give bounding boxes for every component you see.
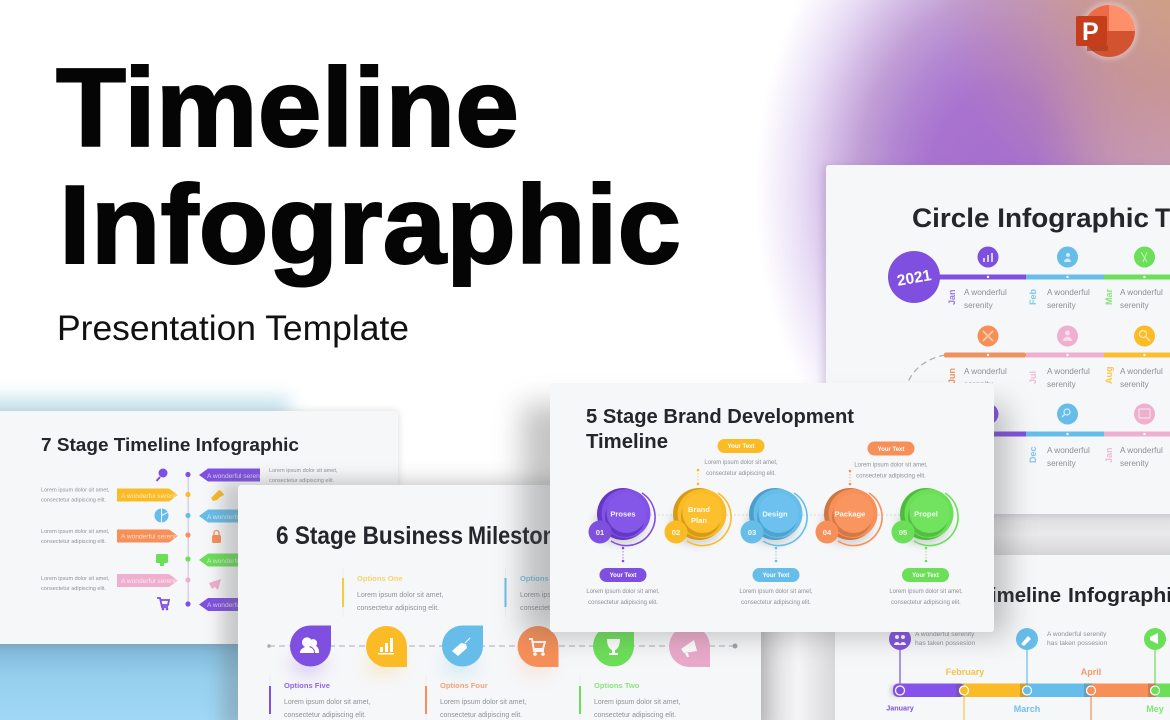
lower options: Options Five <box>284 681 330 690</box>
timeline row 1: A wonderful <box>1047 288 1090 297</box>
timeline row 1: Mar <box>1104 288 1114 305</box>
connecting line <box>650 514 900 516</box>
lower options: Lorem ipsum dolor sit amet, <box>594 699 680 706</box>
descriptive text: Lorem ipsum dolor sit amet, <box>41 576 110 582</box>
subtitle: Presentation Template <box>57 309 409 348</box>
stage 1: Proses <box>588 488 655 546</box>
month labels: February <box>946 667 984 677</box>
timeline row 1: Jan <box>947 289 957 305</box>
callouts below: Lorem ipsum dolor sit amet, <box>586 589 660 595</box>
descriptive text: consectetur adipiscing elit. <box>41 498 107 504</box>
stage 3: Design: 03 <box>748 528 756 537</box>
lower options: Lorem ipsum dolor sit amet, <box>284 699 370 706</box>
left arrow labels: A wonderful serenity <box>121 493 181 500</box>
milestone notes: has taken possesion <box>1047 640 1107 647</box>
callouts below: Your Text <box>912 573 939 579</box>
milestone notes: A wonderful serenity <box>1047 631 1107 638</box>
descriptive text: Lorem ipsum dolor sit amet, <box>41 488 110 494</box>
upper options: Options One <box>357 574 403 583</box>
callouts below: Lorem ipsum dolor sit amet, <box>889 589 963 595</box>
dashed milestone line <box>267 644 738 648</box>
callouts above: Your Text <box>728 444 754 450</box>
timeline row 1: serenity <box>964 301 994 310</box>
timeline row 3: serenity <box>1120 459 1150 468</box>
lower options: consectetur adipiscing elit. <box>594 712 676 719</box>
left arrow labels: A wonderful serenity <box>121 578 181 585</box>
title: Infographic <box>59 163 681 287</box>
stage 3: Design <box>740 488 807 546</box>
timeline row 2 <box>908 326 1170 389</box>
heading: timeline infographic: Timeline <box>979 585 1061 607</box>
left arrow labels <box>117 488 181 587</box>
lower options: Options Two <box>594 681 640 690</box>
callouts above: Lorem ipsum dolor sit amet, <box>704 460 778 466</box>
heading: 6 stage: 6 Stage Business <box>276 522 463 550</box>
upper options: Lorem ipsum dolor sit amet, <box>357 592 443 599</box>
stage 2: Brand Plan: 02 <box>672 528 680 537</box>
heading: circle infographic: Circle Infographic <box>912 203 1149 233</box>
timeline row 2: Aug <box>1104 366 1114 384</box>
milestone pins <box>889 628 1166 720</box>
stage 5: Propel: 05 <box>899 528 908 537</box>
stage 5: Propel: Propel <box>914 510 938 518</box>
panel: 5 stage brand development slide <box>522 383 1008 636</box>
timeline row 1: serenity <box>1120 301 1150 310</box>
timeline row 3: A wonderful <box>1047 446 1090 455</box>
heading: 5 stage <box>586 406 854 453</box>
month labels: Mey <box>1146 704 1164 714</box>
year badge: 2021 <box>896 267 933 290</box>
month labels: January <box>886 704 914 712</box>
heading: 5 stage: Timeline <box>586 431 668 453</box>
timeline row 2: serenity <box>1047 380 1077 389</box>
stage 4: Package: Package <box>835 510 865 518</box>
lower options <box>269 675 680 720</box>
stage 1: Proses: 01 <box>596 528 605 537</box>
right arrow labels: A wonderful serenity <box>207 602 267 609</box>
heading: timeline infographic <box>979 585 1170 607</box>
timeline row 1: Feb <box>1028 288 1038 305</box>
descriptive text: consectetur adipiscing elit. <box>41 539 107 545</box>
heading: 6 stage: Milestones <box>468 522 580 550</box>
left arrow labels: A wonderful serenity <box>121 534 181 540</box>
right arrow labels: A wonderful serenity <box>207 558 267 565</box>
descriptive text: Lorem ipsum dolor sit amet, <box>41 529 110 535</box>
descriptive text: consectetur adipiscing elit. <box>41 586 107 592</box>
right arrow labels: A wonderful serenity <box>207 473 267 480</box>
callouts above <box>697 439 928 485</box>
callouts below: Your Text <box>763 573 789 579</box>
callouts below: Your Text <box>610 573 636 579</box>
month labels: April <box>1081 667 1101 677</box>
milestone notes: A wonderful serenity <box>915 631 975 638</box>
timeline row 2: serenity <box>964 380 994 389</box>
stage 3: Design: Design <box>762 510 788 518</box>
upper options <box>342 568 606 617</box>
panel: 6 stage business milestones slide <box>222 480 766 720</box>
stage 4: Package: 04 <box>823 528 832 537</box>
timeline row 1: serenity <box>1047 301 1077 310</box>
title: Timeline <box>56 46 519 170</box>
callouts above: Lorem ipsum dolor sit amet, <box>854 462 928 468</box>
month labels: March <box>1014 704 1040 714</box>
title <box>56 46 681 287</box>
timeline row 3: Jan <box>1104 447 1114 463</box>
stage 2: Brand Plan: Plan <box>691 516 707 525</box>
callouts below <box>586 547 963 606</box>
timeline bar <box>891 684 1170 697</box>
upper options: Options Three <box>520 574 571 583</box>
timeline row 1: A wonderful <box>964 288 1007 297</box>
lower options: consectetur adipiscing elit. <box>284 712 366 719</box>
timeline row 2: Jun <box>947 368 957 384</box>
timeline row 1 <box>938 246 1170 310</box>
timeline row 2: A wonderful <box>964 367 1007 376</box>
lower options: Options Four <box>440 681 488 690</box>
timeline row 3: Dec <box>1028 446 1038 463</box>
callouts below: Lorem ipsum dolor sit amet, <box>739 589 813 595</box>
stage icons <box>154 468 224 610</box>
milestone notes: has taken possesion <box>915 640 975 647</box>
timeline row 2: serenity <box>1120 380 1150 389</box>
stage shadows <box>594 505 949 545</box>
upper options: consectetur adipiscing elit. <box>520 605 602 612</box>
descriptive text: Lorem ipsum dolor sit amet, <box>269 468 338 474</box>
stage 4: Package <box>816 488 882 546</box>
milestone notes <box>915 631 1107 647</box>
upper options: consectetur adipiscing elit. <box>357 605 439 612</box>
right arrow labels <box>199 468 267 611</box>
panel: 7 stage timeline slide <box>0 411 398 647</box>
timeline row 3: A wonderful <box>1120 446 1163 455</box>
panel: monthly timeline infographic slide <box>835 555 1170 720</box>
descriptive text <box>41 468 338 592</box>
year badge <box>888 251 940 303</box>
callouts above: consectetur adipiscing elit. <box>856 474 926 480</box>
milestone teardrops <box>290 626 710 673</box>
right arrow labels: A wonderful serenity <box>207 514 267 521</box>
callouts below: consectetur adipiscing elit. <box>588 600 658 606</box>
stage 5: Propel <box>892 488 958 546</box>
icon: PowerPoint logo <box>1076 2 1138 60</box>
heading: 7 stage: 7 Stage Timeline Infographic <box>41 434 299 455</box>
stage 1: Proses: Proses <box>610 510 636 518</box>
stage 2: Brand Plan: Brand <box>688 505 710 514</box>
icon: PowerPoint logo: P <box>1082 18 1099 46</box>
timeline row 1: A wonderful <box>1120 288 1163 297</box>
timeline row 3 <box>944 404 1170 468</box>
heading: 5 stage: 5 Stage Brand Development <box>586 406 854 428</box>
timeline row 3: serenity <box>1047 459 1077 468</box>
callouts below: consectetur adipiscing elit. <box>891 600 961 606</box>
central spine with dots <box>185 472 191 607</box>
timeline row 2: A wonderful <box>1047 367 1090 376</box>
lower options: consectetur adipiscing elit. <box>440 712 522 719</box>
lower options: Lorem ipsum dolor sit amet, <box>440 699 526 706</box>
upper options: Lorem ipsum dolor sit amet, <box>520 592 606 599</box>
callouts above: consectetur adipiscing elit. <box>706 471 776 477</box>
callouts above: Your Text <box>878 447 904 453</box>
panel: circle infographic timeline slide <box>823 165 1170 515</box>
callouts below: consectetur adipiscing elit. <box>741 600 811 606</box>
timeline row 2: A wonderful <box>1120 367 1163 376</box>
month labels <box>886 667 1164 714</box>
stage 2: Brand Plan <box>664 488 731 546</box>
descriptive text: consectetur adipiscing elit. <box>269 478 335 484</box>
timeline row 2: Jul <box>1028 371 1038 384</box>
heading: 6 stage <box>276 522 580 550</box>
